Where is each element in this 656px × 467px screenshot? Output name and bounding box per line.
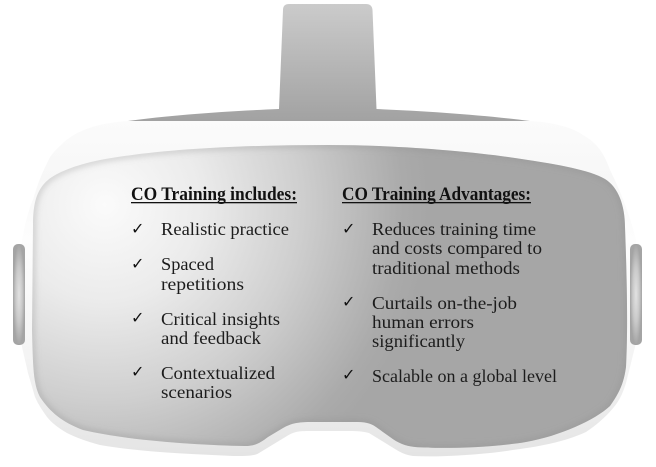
lens visor [32,145,627,448]
list item: contextualized scenarios: Contextualized [161,363,275,383]
list item: critical insights: Critical insights [161,309,280,329]
list item: curtails errors [342,292,517,351]
right heading: CO Training Advantages: [342,184,531,205]
right side button [630,244,642,345]
list item: spaced repetitions: Spaced [161,254,214,274]
list item: reduces time and costs: traditional methods [372,258,520,278]
left column: CO Training includes [131,184,297,402]
list item: curtails errors: human errors [372,312,474,332]
head strap [128,4,530,121]
list item: reduces time and costs: and costs compared to [372,238,542,258]
list item: curtails errors: Curtails on-the-job [372,293,517,313]
list item: spaced repetitions: repetitions [161,274,244,294]
left heading: CO Training includes: [131,184,297,205]
list item: critical insights [131,308,280,348]
list item: critical insights: and feedback [161,328,261,348]
list item: curtails errors: significantly [372,331,465,351]
list item: reduces time and costs: ✓ [342,219,355,238]
right column: CO Training advantages [342,184,557,386]
list item: contextualized scenarios: ✓ [131,362,144,381]
list item: realistic practice: Realistic practice [161,219,289,239]
list item: reduces time and costs: Reduces training time [372,219,536,239]
list item: spaced repetitions [131,254,244,294]
list item: reduces time and costs [342,219,542,278]
headset shell [22,121,636,456]
list item: contextualized scenarios: scenarios [161,382,232,402]
left side button [13,244,25,345]
list item: critical insights: ✓ [131,308,144,327]
list item: scalable: Scalable on a global level [372,366,557,386]
list item: curtails errors: ✓ [342,292,355,311]
list item: realistic practice: ✓ [131,219,144,238]
list item: spaced repetitions: ✓ [131,254,144,273]
list item: scalable: ✓ [342,365,355,384]
list item: contextualized scenarios [131,362,275,402]
